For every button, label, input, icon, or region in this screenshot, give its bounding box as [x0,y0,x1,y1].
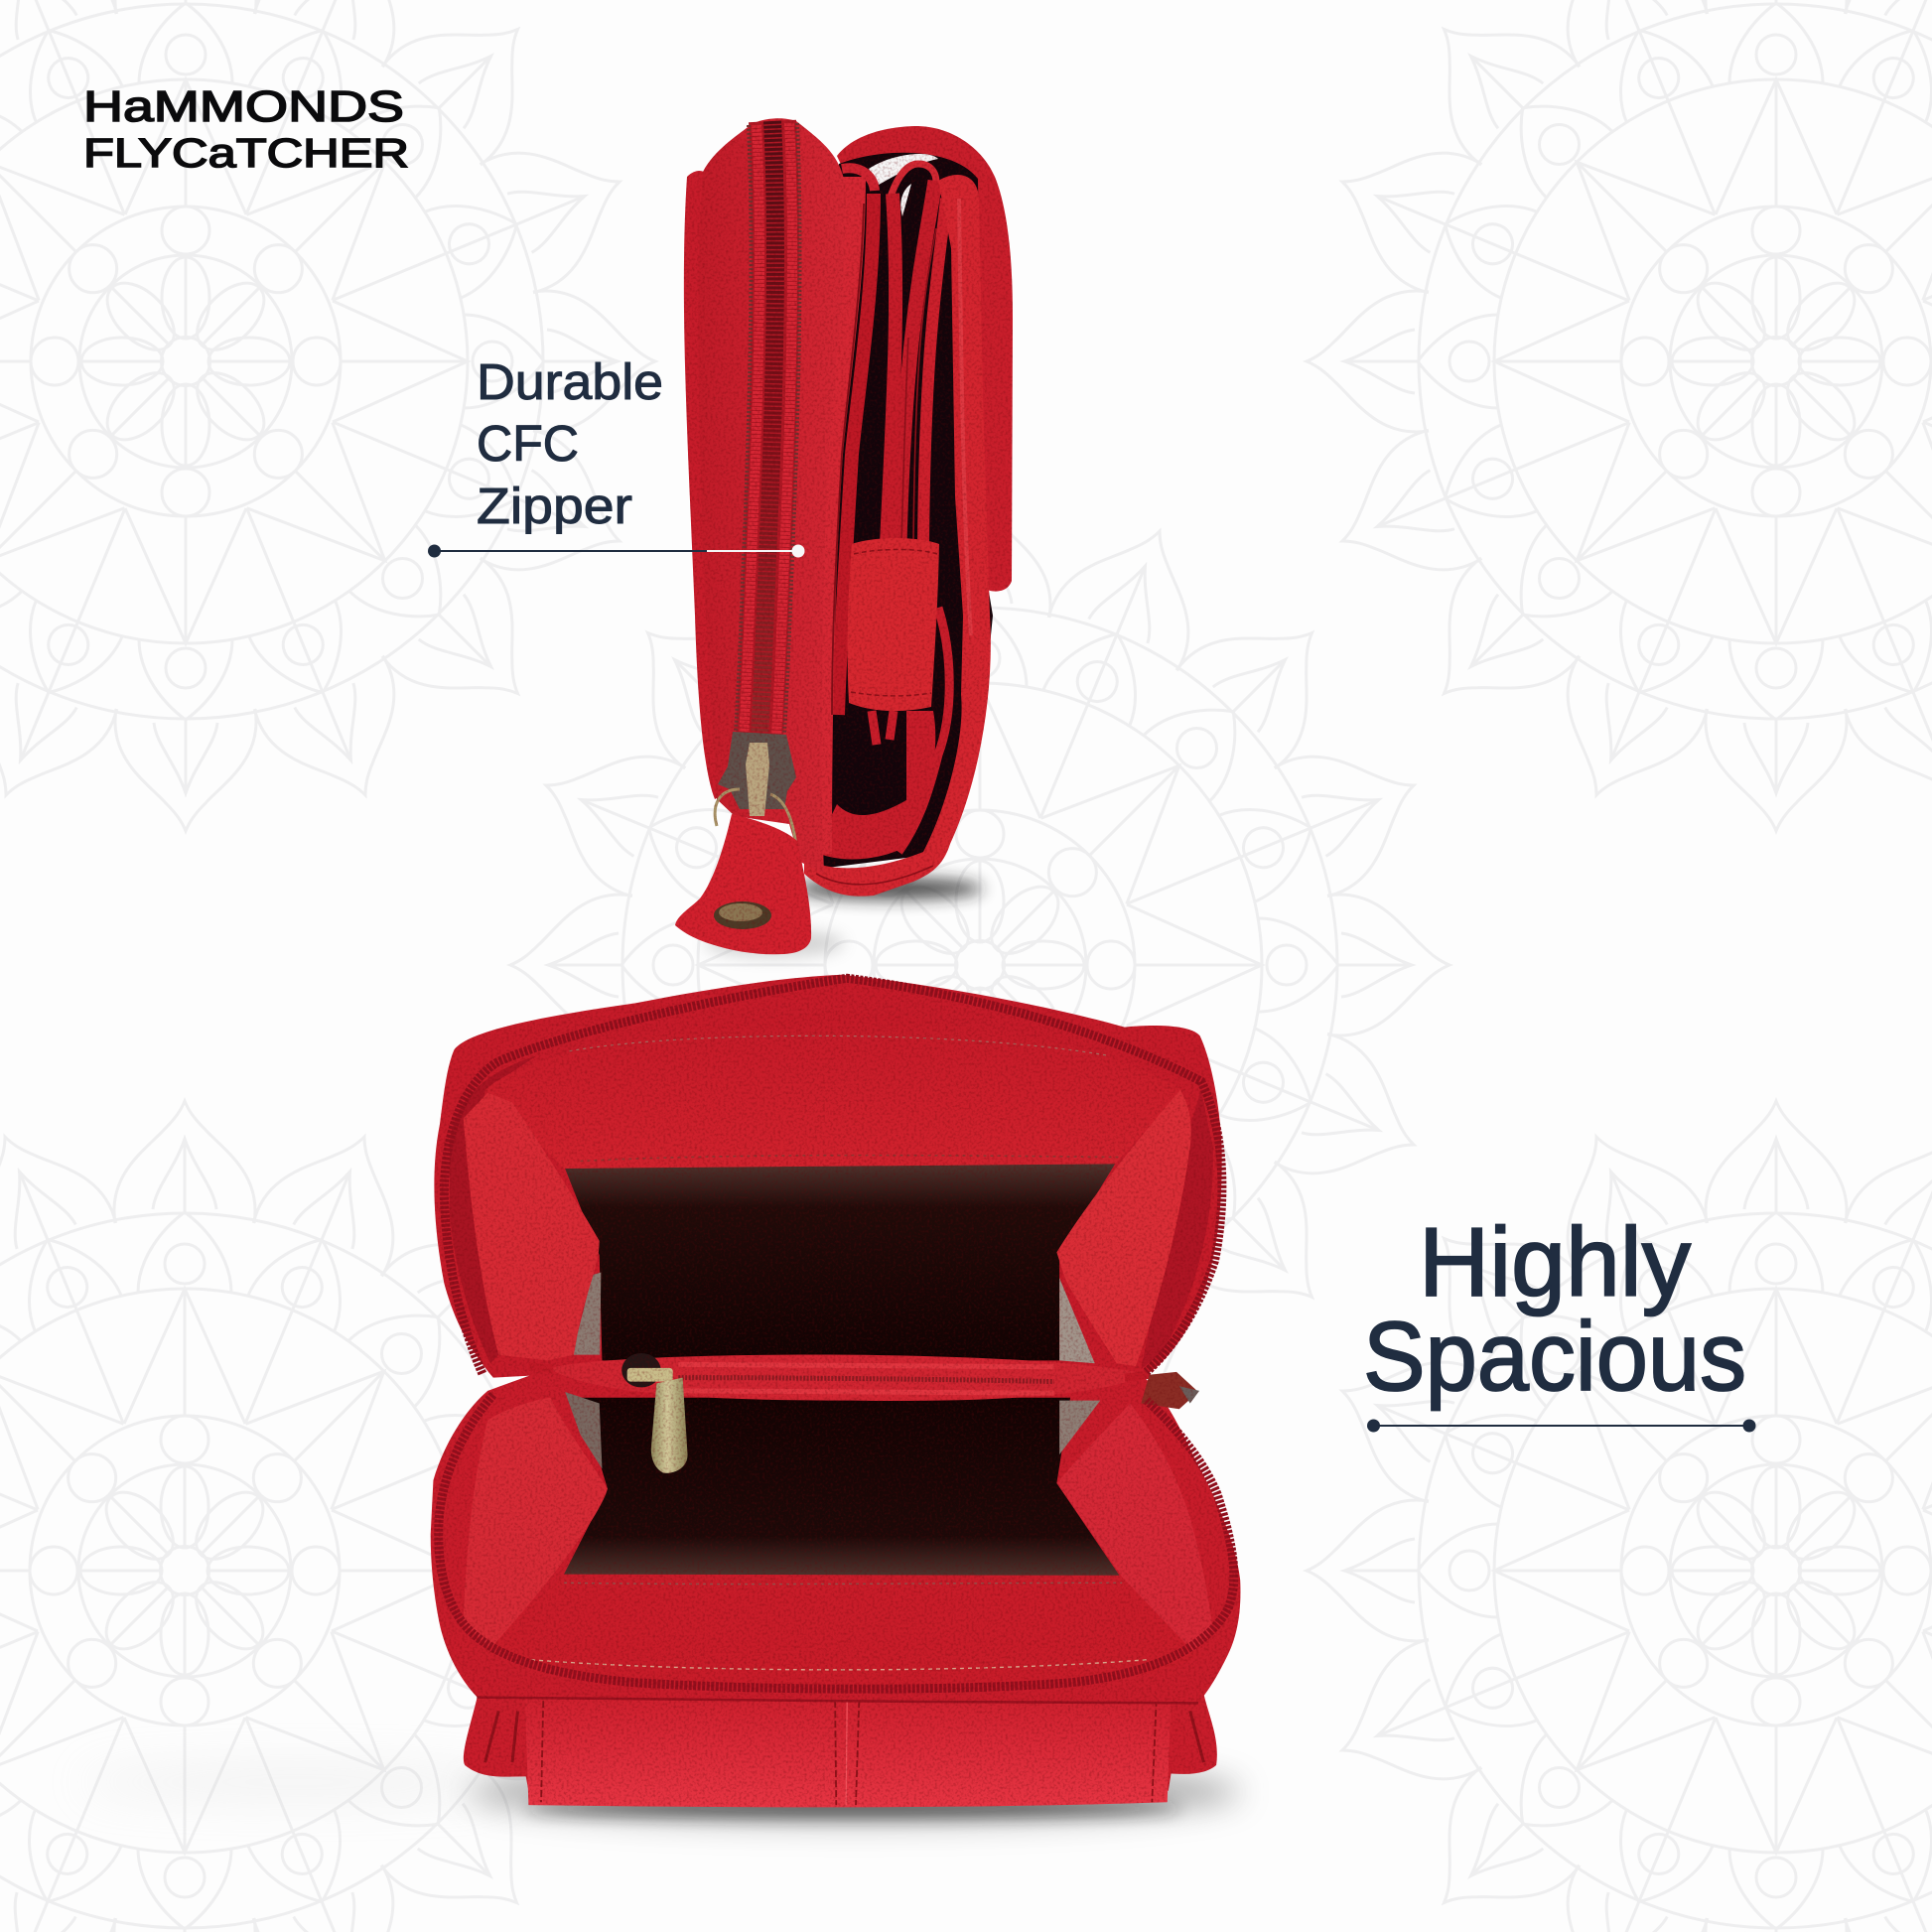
callout text: Zipper [477,478,632,534]
heading text: Spacious [1363,1302,1746,1411]
zipper centre teeth [759,121,775,737]
product photo: open wallet [431,975,1240,1807]
lower back panel [487,1575,1201,1688]
corner gusset lower right [1056,1403,1213,1651]
heading: Highly Spacious [1363,1207,1755,1432]
interior pocket [819,153,993,869]
metal zip slider [715,732,796,846]
flap at back [837,126,1013,592]
inner zip teeth [678,1378,1054,1382]
callout text: Durable [477,353,663,410]
corner gusset upper right [1056,1090,1191,1366]
zipper tape [759,121,775,737]
heading text [1363,1207,1746,1411]
leather strap [848,538,939,711]
closed flap side pieces [464,1694,1217,1791]
zipper leather tab [675,814,811,954]
small strap ends [872,711,894,745]
zipper metal edges [736,123,800,733]
card folds [887,164,946,544]
main back band [804,175,991,897]
upper compartment lining [565,1164,1115,1360]
crease between shell and flap [477,1698,1198,1703]
heading underline [1367,1420,1755,1432]
main zipper teeth upper half [444,978,1222,1374]
upper half shell [434,975,1222,1389]
lower inner fold [820,711,935,859]
zipper side body [698,118,845,874]
zipper ends [528,1366,1199,1409]
corner gusset lower left [464,1398,608,1648]
brass rivet [714,901,771,929]
inner zip pocket band [550,1355,1144,1401]
upper side interior shading [450,1055,537,1363]
brand logo [83,82,409,176]
main zipper teeth lower half [439,1395,1234,1689]
front gusset strips [820,168,875,854]
zipper bright bands [744,123,792,737]
callout: Durable CFC Zipper [428,353,804,558]
callout leader line [428,544,804,558]
heading text: Highly [1419,1207,1691,1316]
lower compartment lining [564,1398,1119,1576]
shadows under the side-view wallet [705,878,983,957]
lower half shell [431,1369,1240,1703]
brand logo: HaMMONDS [83,82,404,131]
upper back panel [485,1010,1182,1169]
brand logo: FLYCaTCHER [83,130,409,176]
shadow under the open wallet [79,1762,1241,1822]
product photo: side view of wallet [675,118,1013,954]
corner gusset upper left [464,1093,600,1360]
left edge binding [684,171,733,799]
central flap roll [525,1694,1172,1807]
callout text [477,353,663,534]
flap stitching [541,1700,1157,1805]
white gap at top [869,154,938,185]
callout text: CFC [477,415,579,472]
inner panel stitching [581,1156,1119,1162]
brass zip puller [621,1353,688,1473]
beige lining slivers [572,1272,601,1355]
